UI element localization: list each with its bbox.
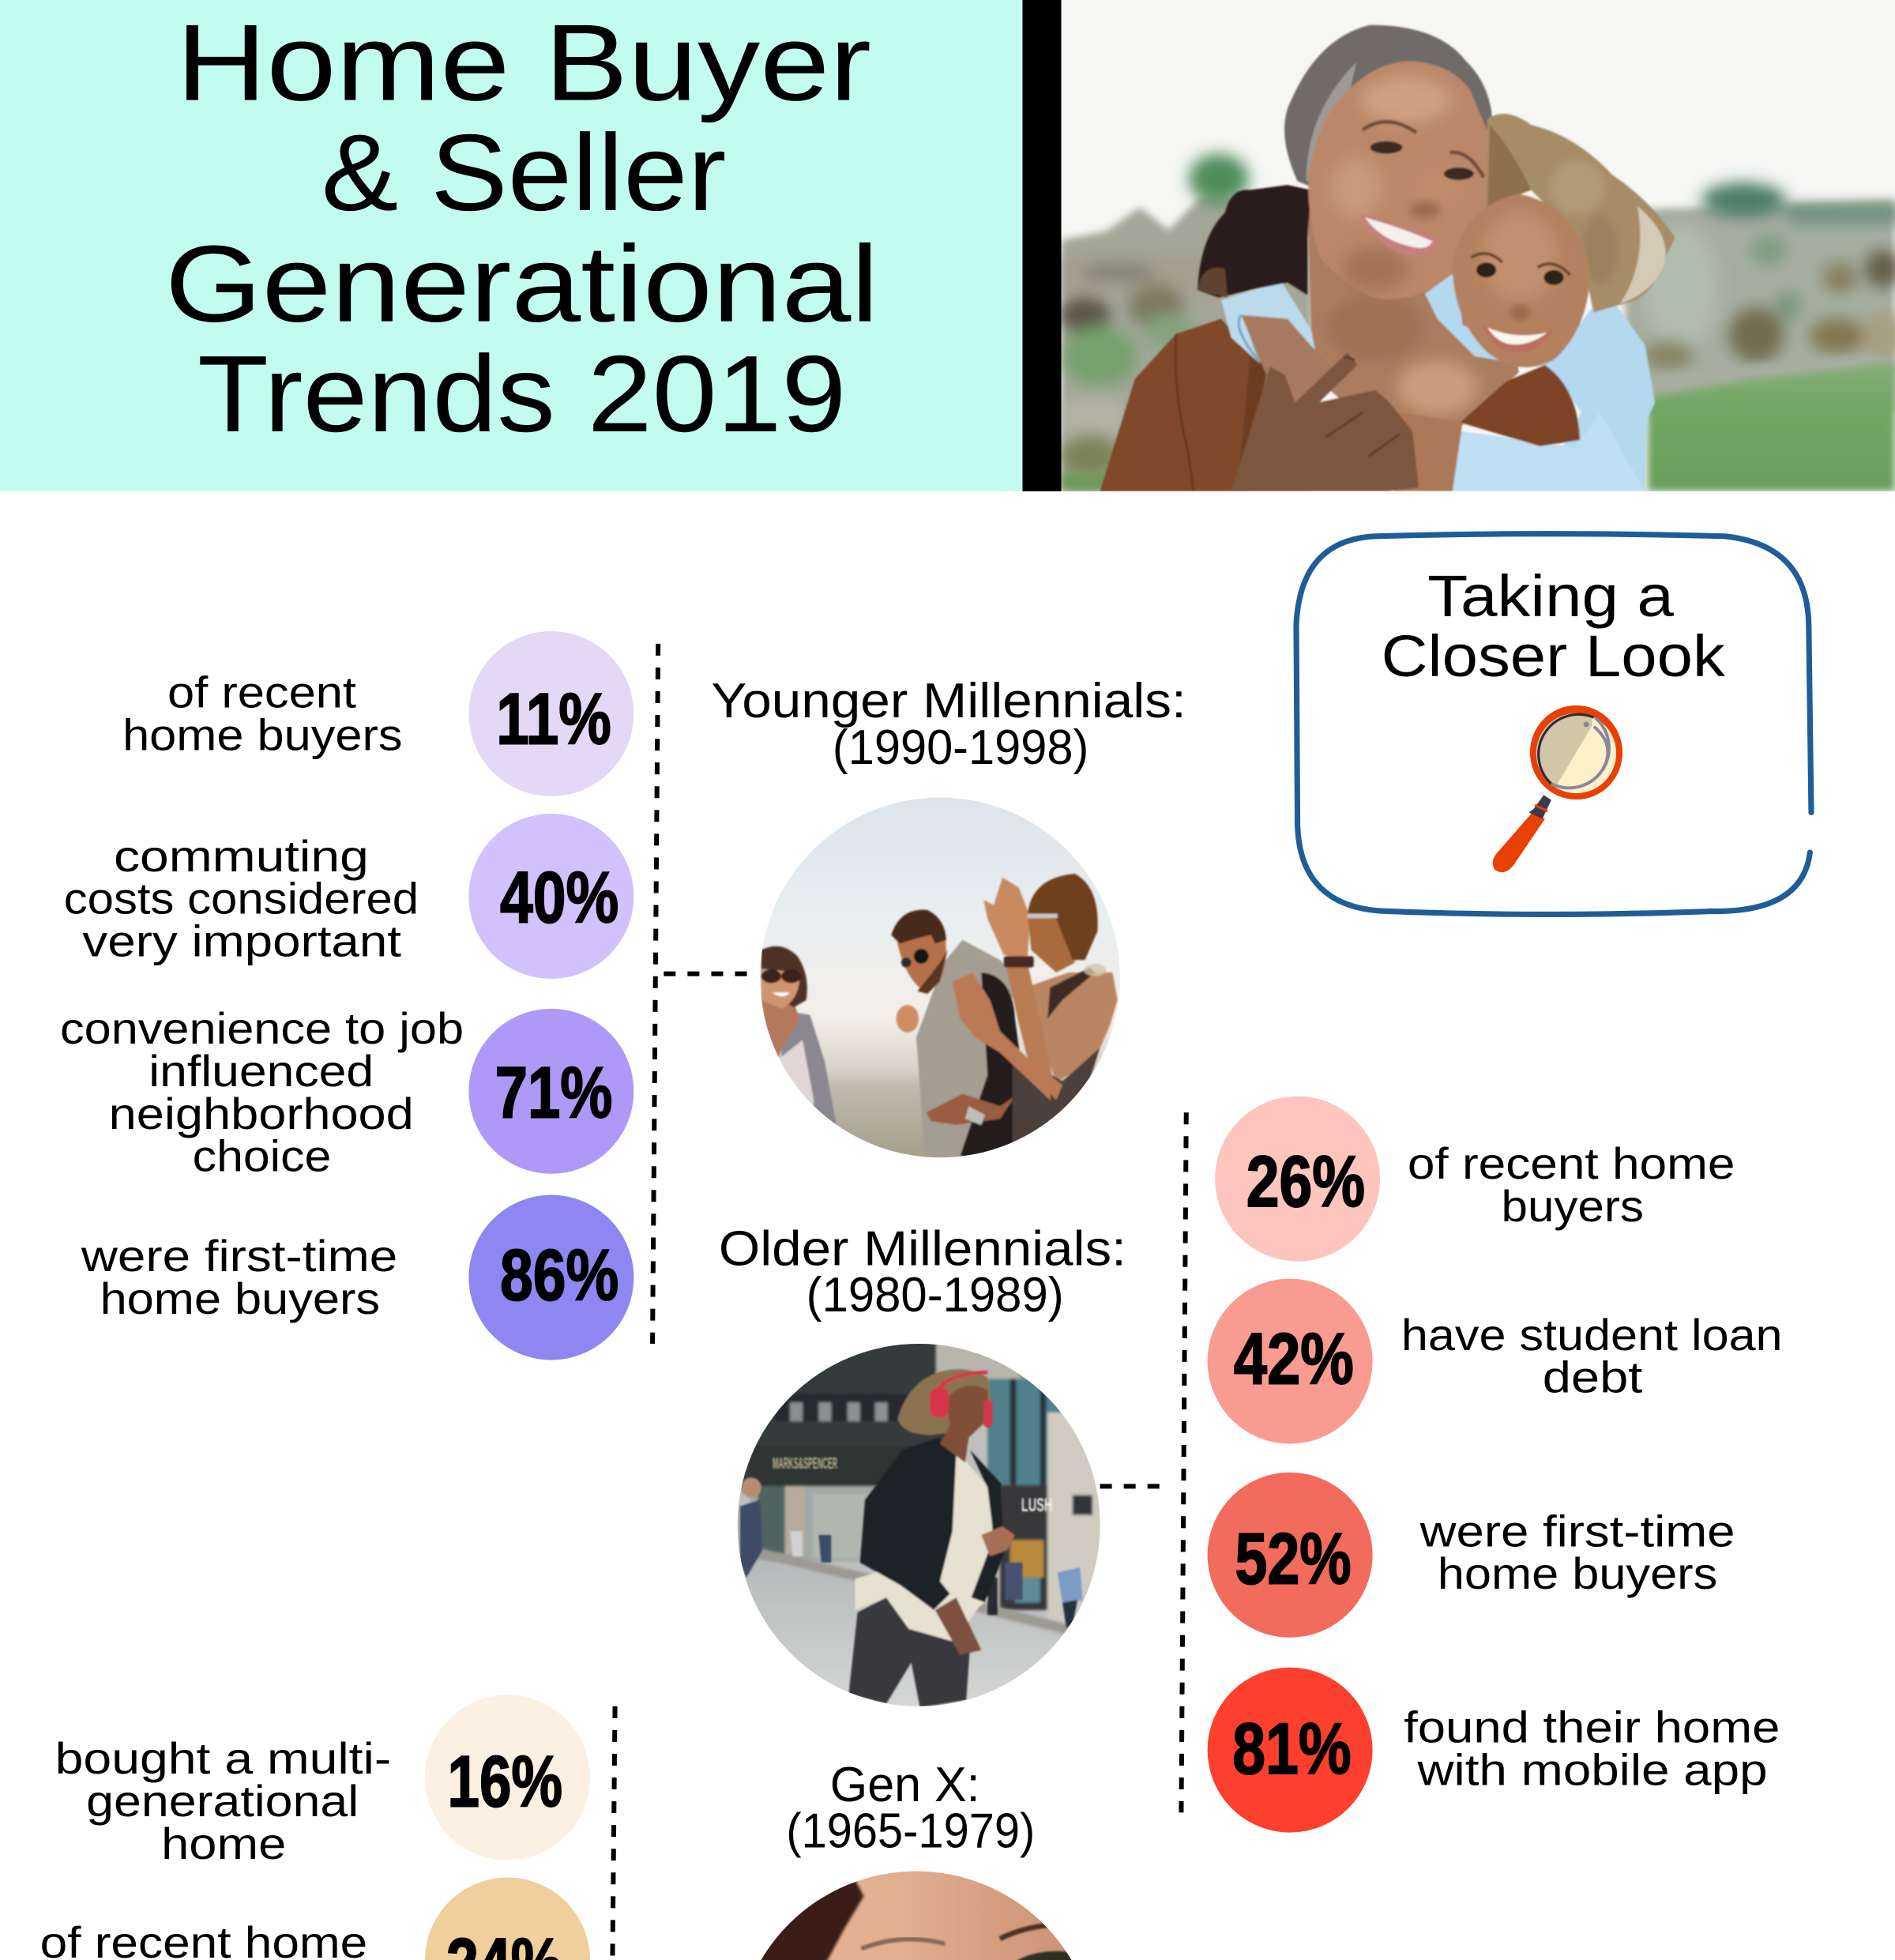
- title: [165, 2, 878, 455]
- stat: 11%: home buyers: [122, 710, 403, 759]
- face and neck: [940, 1386, 989, 1462]
- photo: close-up of woman's face: [738, 1868, 1100, 1960]
- stat: 71%: neighborhood: [109, 1089, 414, 1138]
- child's shirt collar at left: [1221, 281, 1315, 363]
- middle man's lower hand: [927, 1093, 1015, 1125]
- heading: younger millennials: Younger Millennials:: [711, 674, 1186, 728]
- stat: 24%: [40, 1878, 590, 1960]
- stat: 71%: choice: [193, 1132, 331, 1181]
- dashed connector: [1100, 1112, 1186, 1812]
- woman's hand: [1231, 352, 1419, 491]
- stat: 86%: home buyers: [100, 1274, 380, 1323]
- callout heading: Taking a: [1427, 563, 1675, 629]
- heading: gen x: Gen X:: [830, 1758, 980, 1812]
- callout heading: [1382, 563, 1726, 689]
- heading: older millennials: Older Millennials:: [719, 1221, 1126, 1276]
- title: & Seller: [321, 112, 726, 234]
- stat: 16%: [55, 1695, 590, 1868]
- stat: 42%: 42%: [1234, 1319, 1354, 1400]
- child's eyes and smile: [1472, 254, 1570, 275]
- photo: woman with headphones on street: [731, 1337, 1112, 1713]
- stat: 71%: 71%: [495, 1053, 612, 1134]
- stat: 81%: 81%: [1232, 1709, 1352, 1789]
- callout box: taking a closer look: [1296, 534, 1811, 914]
- right man's head: [1028, 915, 1075, 972]
- stat: 52%: were first-time: [1419, 1507, 1735, 1556]
- heading: older millennials: (1980-1989): [807, 1268, 1064, 1322]
- stat: 40%: [64, 814, 634, 979]
- middle man's tee: [960, 972, 1022, 1157]
- bystanders: [740, 1500, 762, 1578]
- stat: 26%: 26%: [1246, 1142, 1365, 1222]
- icon: magnifying glass: [1493, 705, 1622, 872]
- stat: 40%: costs considered: [64, 875, 419, 924]
- stat: 81%: [1208, 1668, 1780, 1833]
- stat: 42%: have student loan: [1401, 1311, 1783, 1360]
- stat: 40%: very important: [82, 916, 401, 965]
- dashed connector: [652, 644, 758, 1344]
- stat: 52%: home buyers: [1438, 1549, 1717, 1598]
- woman on left: [781, 1010, 837, 1125]
- middle hand raised: [953, 972, 1052, 1100]
- stat: 42%: debt: [1543, 1353, 1642, 1402]
- title: Trends 2019: [197, 333, 846, 455]
- stat: 16%: generational: [86, 1777, 359, 1826]
- photo: woman with headphones on street: LUSH: [1021, 1495, 1052, 1516]
- stat: 26%: buyers: [1502, 1182, 1644, 1231]
- stat: 40%: 40%: [500, 858, 619, 939]
- child's forearm: [1393, 413, 1463, 491]
- curly hair: [897, 1369, 992, 1435]
- child's arm over shoulder: [1240, 314, 1322, 403]
- middle man's head: [896, 934, 948, 989]
- woman's eyes and brows: [1363, 122, 1416, 133]
- right man's torso: [1025, 972, 1118, 1082]
- title background: [0, 0, 1022, 491]
- lower hand: [935, 1597, 981, 1655]
- stat: 71%: influenced: [149, 1047, 374, 1096]
- title: Home Buyer: [176, 2, 871, 124]
- stat: 26%: of recent home: [1408, 1139, 1735, 1188]
- right man's hand: [983, 878, 1030, 960]
- heading: gen x: [786, 1758, 1035, 1859]
- photo: friends dancing: [750, 788, 1125, 1163]
- stat: 52%: 52%: [1235, 1519, 1352, 1600]
- child's face: [1453, 194, 1590, 367]
- hero photo: grandmother and child: [1060, 0, 1895, 491]
- neck and chest: [1307, 200, 1519, 440]
- heading: gen x: (1965-1979): [786, 1804, 1035, 1859]
- header panel: [0, 0, 1895, 491]
- woman's shirt: [1100, 318, 1261, 491]
- stat: 16%: home: [161, 1819, 286, 1868]
- brown dress: [1460, 365, 1580, 446]
- stat: 16%: bought a multi-: [55, 1734, 391, 1783]
- stat: 71%: [60, 1004, 634, 1181]
- grey hair: [1284, 25, 1493, 187]
- stat: 26%: [1215, 1097, 1735, 1262]
- dashed connector: [612, 1706, 615, 1960]
- red headphones: [934, 1372, 987, 1400]
- group: gen x: [40, 1695, 1100, 1960]
- child's hair: [1487, 114, 1675, 313]
- hand with phone: [981, 1526, 1015, 1556]
- stat: 71%: convenience to job: [60, 1004, 464, 1053]
- woman's smile: [1359, 214, 1438, 257]
- dark bun: [1198, 185, 1311, 298]
- group: younger millennials: [60, 631, 1186, 1360]
- photo: woman with headphones on street: MARKS&SPENCER: [773, 1454, 837, 1473]
- title: Generational: [165, 224, 878, 345]
- stat: 11%: of recent: [167, 668, 356, 717]
- stat: 81%: with mobile app: [1416, 1745, 1768, 1794]
- stat: 42%: [1208, 1279, 1783, 1444]
- face: [1308, 61, 1487, 299]
- right man's raised arm: [1006, 962, 1062, 1100]
- jacket: [860, 1438, 957, 1610]
- trousers: [848, 1597, 970, 1707]
- shirt: [855, 1450, 994, 1645]
- stat: 86%: 86%: [500, 1236, 619, 1316]
- heading: younger millennials: [711, 674, 1186, 775]
- middle man's scarf: [916, 940, 1025, 1157]
- stat: 16%: 16%: [448, 1741, 562, 1822]
- stat: 52%: [1208, 1473, 1735, 1638]
- child's shirt: [1425, 271, 1655, 491]
- heading: younger millennials: (1990-1998): [833, 720, 1088, 775]
- hand-drawn blue frame: [1296, 534, 1811, 914]
- black divider bar: [1022, 0, 1062, 491]
- stat: 11%: 11%: [496, 679, 611, 759]
- stat: 86%: [81, 1195, 634, 1360]
- stat: 40%: commuting: [114, 832, 369, 881]
- stat: 11%: [122, 631, 634, 796]
- stat: 86%: were first-time: [81, 1232, 397, 1281]
- heading: older millennials: [719, 1221, 1126, 1322]
- group: older millennials: [719, 1097, 1783, 1833]
- callout heading: Closer Look: [1382, 623, 1726, 689]
- stat: 81%: found their home: [1404, 1703, 1780, 1752]
